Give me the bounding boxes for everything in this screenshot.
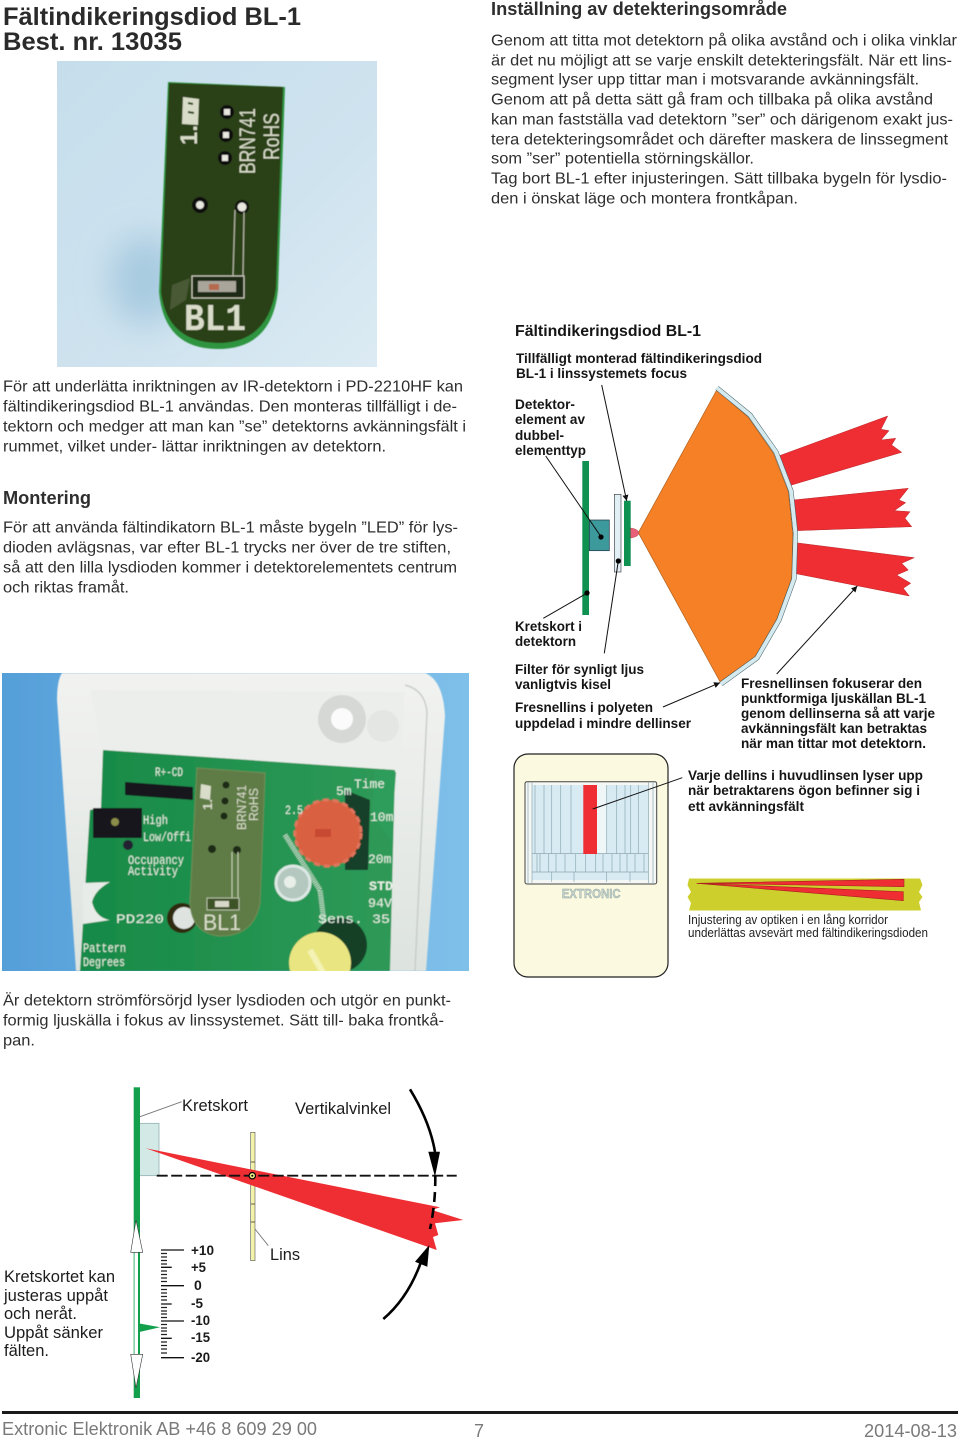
diagram labels: Kretskort <box>182 1096 248 1115</box>
caption: Injustering <box>688 912 928 940</box>
diagram: detector front with lit lens segment <box>514 754 682 977</box>
diagram labels: vanligtvis kisel <box>515 676 611 692</box>
text block: Inställning <box>491 32 958 208</box>
lens <box>251 1132 255 1261</box>
photo: BL-1 mounted in detector: STD <box>369 879 393 894</box>
photo: BL-1 mounted in detector: PD220 <box>116 912 164 927</box>
photo: BL-1 mounted in detector: Activity <box>128 864 178 879</box>
angle scale <box>161 1242 214 1365</box>
text block: Kretskortet kan justeras <box>3 1267 115 1360</box>
horizontal axis <box>157 1175 457 1177</box>
diagram labels: element av <box>515 411 585 427</box>
text block: Kretskortet kan justeras: fälten. <box>4 1341 49 1360</box>
diagram labels: Fresnellinsen fokuserar den <box>741 675 922 691</box>
red field beams <box>777 416 914 596</box>
diagram labels: punktformiga ljuskällan BL-1 <box>741 690 926 706</box>
photo: BL-1 mounted in detector: 20m <box>368 852 392 867</box>
diagram labels <box>515 350 935 751</box>
text block: Inställning: Tag bort BL-1 efter injusteringen. Sätt tillbaka bygeln för lysdio- <box>491 171 947 188</box>
photo: BL-1 mounted in detector: R+-CD <box>155 765 183 780</box>
text block: after mounting: pan. <box>3 1033 35 1050</box>
diagram labels: när man tittar mot detektorn. <box>741 735 926 751</box>
diagram labels: detektorn <box>515 633 576 649</box>
diagram: vertical angle adjustment <box>131 1087 463 1398</box>
text block: Inställning: som ”ser” potentiella störningskällor. <box>491 151 754 168</box>
text block: Inställning: Genom att titta mot detektorn på olika avstånd och i olika vinklar <box>491 32 958 50</box>
text block: Montering: så att den lilla lysdioden kommer i detektorelementets centrum <box>3 559 457 577</box>
photo: BL-1 mounted in detector: Degrees <box>83 955 125 970</box>
diagram labels: Fresnellins i polyeten <box>515 699 653 715</box>
diagram labels: avkänningsfält kan betraktas <box>741 720 927 736</box>
text block: Montering: dioden avlägsnas, var efter BL-1 trycks ner över de tre stiften, <box>3 540 451 557</box>
diagram labels: Detektor- <box>515 396 575 412</box>
photo: BL-1 mounted in detector: Pattern <box>83 941 126 956</box>
text block: Inställning: kan man fastställa vad detektorn ”ser” och därigenom exakt jus- <box>491 112 953 129</box>
brand name: EXTRONIC <box>562 887 621 901</box>
caption: Injustering: Injustering av optiken i en lång korridor <box>688 912 889 927</box>
text block: Montering <box>3 519 458 597</box>
orange light cone <box>638 390 793 682</box>
sliding circuit board <box>131 1087 160 1398</box>
diagram labels: BL-1 i linssystemets focus <box>516 365 687 381</box>
circuit board, detector element, filter and BL-1 <box>582 461 639 615</box>
text block: Kretskortet kan justeras: Kretskortet kan <box>4 1267 115 1286</box>
text block: Inställning: är det nu möjligt att se varje enskilt detekteringsfält. När ett lins- <box>491 53 952 70</box>
photo: BL-1 circuit board: BL1 <box>184 299 246 342</box>
angle scale: -15 <box>191 1329 210 1345</box>
footer <box>2 1419 957 1439</box>
lit lens segment <box>583 785 597 854</box>
text block: Inställning: Genom att på detta sätt gå fram och tillbaka på olika avstånd <box>491 91 933 109</box>
leader lines <box>543 385 857 707</box>
angle arrows <box>383 1089 440 1319</box>
diagram: optics of field indicator diode <box>515 350 935 751</box>
diagram labels <box>182 1096 391 1264</box>
diagram labels: genom dellinserna så att varje <box>741 705 935 721</box>
photo: BL-1 circuit board: BRN741 <box>235 108 260 174</box>
photo: BL-1 mounted in detector: 1. <box>200 799 215 810</box>
text block: after mounting: Är detektorn strömförsörjd lyser lysdioden och utgör en punkt- <box>3 992 451 1010</box>
photo: BL-1 mounted in detector: High <box>143 813 168 828</box>
title: Fältindikeringsdiod BL-1 <box>3 3 301 31</box>
photo: BL-1 mounted in detector <box>2 673 469 994</box>
text block: after mounting <box>3 992 451 1050</box>
heading: Montering: Montering <box>3 488 91 508</box>
text block: introduction: tektorn och medger att man kan ”se” detektorns avkänningsfält i <box>3 419 466 436</box>
angle scale: -20 <box>191 1349 210 1365</box>
text block: Montering: För att använda fältindikatorn BL-1 måste bygeln ”LED” för lys- <box>3 519 458 537</box>
angle scale: +5 <box>191 1259 206 1275</box>
photo: BL-1 circuit board <box>57 61 377 367</box>
text block: Inställning: tera detekteringsområdet och därefter maskera de linssegment <box>491 131 949 149</box>
diagram labels: Tillfälligt monterad fältindikeringsdiod <box>516 350 762 366</box>
text block: Kretskortet kan justeras: justeras uppåt <box>3 1286 108 1305</box>
diagram labels: Vertikalvinkel <box>295 1099 391 1118</box>
caption: Injustering: underlättas avsevärt med fältindikeringsdioden <box>688 925 928 940</box>
caption: Varje dellins <box>688 767 923 814</box>
diagram labels: Kretskort i <box>515 618 582 634</box>
diagram labels: uppdelad i mindre dellinser <box>515 715 692 731</box>
diagram heading: Fältindikeringsdiod BL-1: Fältindikeringsdiod BL-1 <box>515 323 701 340</box>
footer: Extronic Elektronik AB +46 8 609 29 00 <box>2 1419 317 1439</box>
diagram labels: dubbel- <box>515 427 564 443</box>
photo: BL-1 mounted in detector: 5m <box>336 784 352 799</box>
text block: Montering: och riktas framåt. <box>3 579 129 597</box>
red field wedge <box>146 1148 463 1250</box>
text block: Kretskortet kan justeras: Uppåt sänker <box>4 1323 103 1342</box>
photo: BL-1 circuit board: RoHS <box>259 113 284 160</box>
photo: BL-1 mounted in detector: Occupancy <box>128 853 184 868</box>
title <box>3 3 301 56</box>
caption: Varje dellins: Varje dellins i huvudlinsen lyser upp <box>688 767 923 783</box>
angle scale: 0 <box>194 1277 202 1293</box>
text block: introduction <box>3 379 466 456</box>
angle scale: -10 <box>191 1312 210 1328</box>
text block: introduction: För att underlätta inriktningen av IR-detektorn i PD-2210HF kan <box>3 379 463 396</box>
text block: Inställning: segment lyser upp tittar man i motsvarande avkänningsfält. <box>491 72 919 89</box>
caption: Varje dellins: när betraktarens ögon befinner sig i <box>688 782 920 798</box>
text block: introduction: rummet, vilket under- lättar inriktningen av detektorn. <box>3 439 386 456</box>
fresnel lens strip <box>717 388 796 684</box>
photo: BL-1 mounted in detector: RoHS <box>246 788 261 821</box>
title: Best. nr. 13035 <box>3 28 182 56</box>
photo: BL-1 mounted in detector: 2.5 <box>285 803 303 818</box>
angle scale: -5 <box>191 1295 203 1311</box>
text block: introduction: fältindikeringsdiod BL-1 användas. Den monteras tillfälligt i de- <box>3 399 457 416</box>
photo: BL-1 mounted in detector: BL1 <box>203 910 241 935</box>
photo: BL-1 mounted in detector: 94V <box>368 896 392 911</box>
photo: BL-1 mounted in detector: BRN741 <box>234 785 249 830</box>
text block: Inställning: den i önskat läge och montera frontkåpan. <box>491 190 798 208</box>
photo: BL-1 circuit board: 1. <box>176 125 203 145</box>
text block: after mounting: formig ljuskälla i fokus av linssystemet. Sätt till- baka frontkå- <box>3 1012 444 1030</box>
photo: BL-1 mounted in detector: Low/Offi <box>143 830 191 845</box>
photo: BL-1 mounted in detector: Time <box>354 777 385 792</box>
photo: BL-1 mounted in detector: 10m <box>370 810 394 825</box>
diagram labels: Filter för synligt ljus <box>515 661 644 677</box>
caption: Varje dellins: ett avkänningsfält <box>688 798 804 814</box>
leader lines <box>140 1102 268 1246</box>
diagram labels: elementtyp <box>515 442 586 458</box>
text block: Kretskortet kan justeras: och neråt. <box>4 1304 77 1323</box>
pale detector box <box>139 1123 159 1176</box>
photo: BL-1 mounted in detector: Sens. 35 <box>318 912 390 927</box>
diagram labels: Lins <box>270 1245 300 1264</box>
angle scale: +10 <box>191 1242 214 1258</box>
diagram: corridor beams <box>688 878 922 910</box>
